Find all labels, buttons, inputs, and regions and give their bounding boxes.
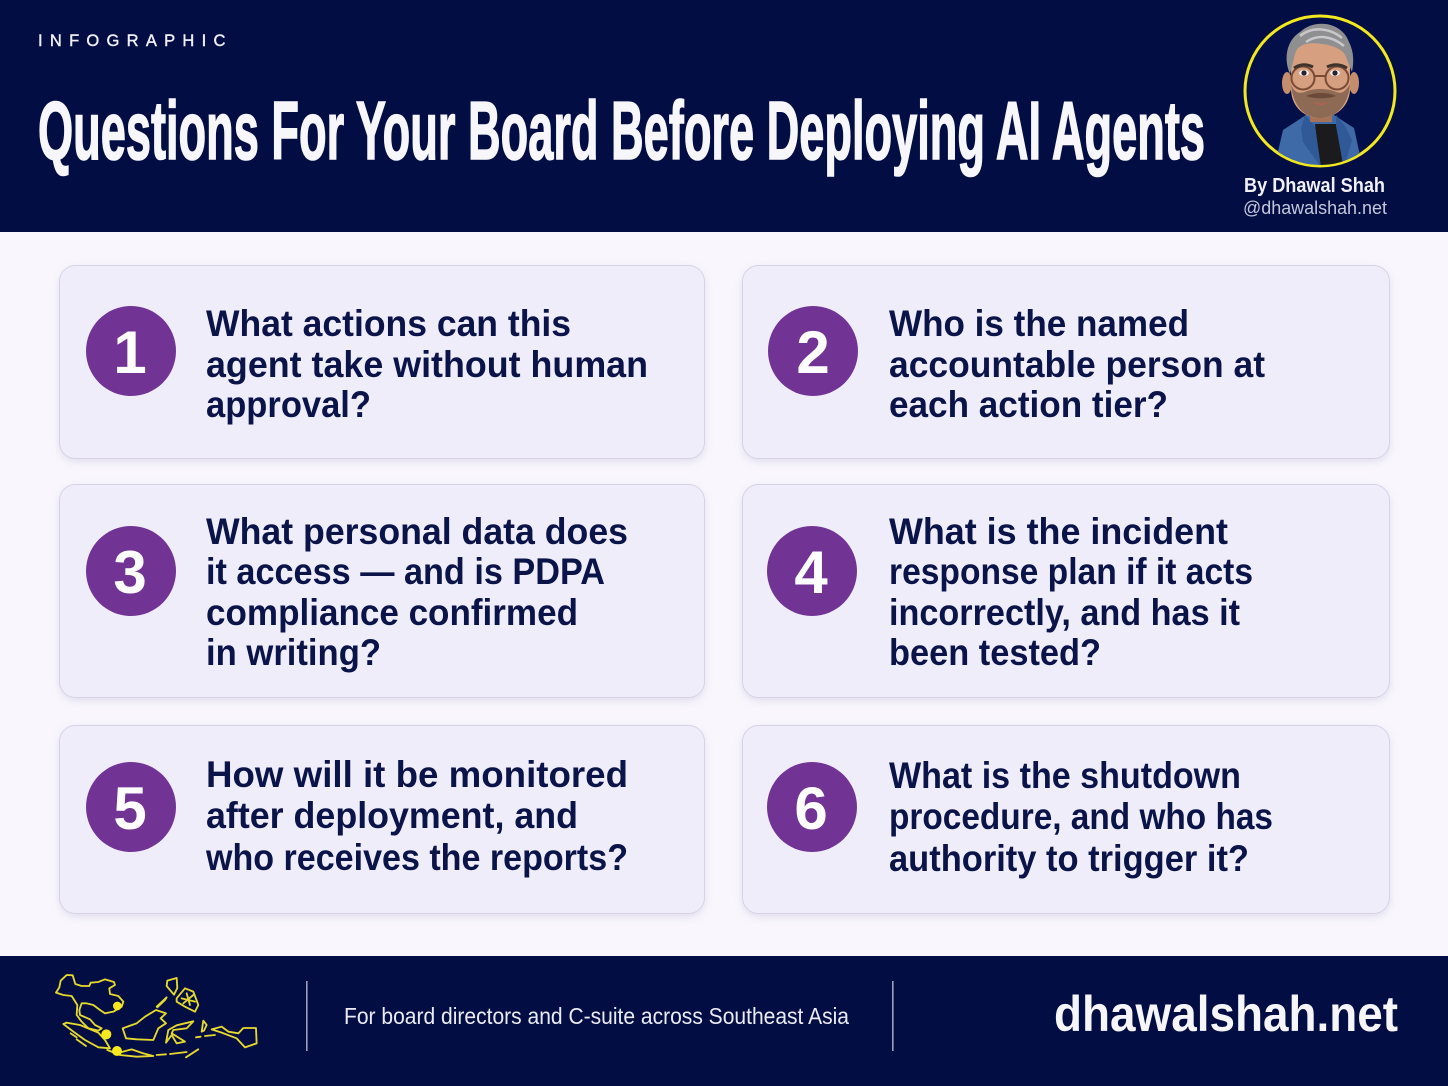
panel: question 2 [742,266,1390,458]
question text 2: each action tier? [889,384,1168,425]
footer band [0,956,1448,1086]
panel: question 6 [742,726,1390,914]
question text 5: How will it be monitored [206,754,628,795]
question text 4: been tested? [889,632,1101,673]
author portrait [1245,16,1395,172]
number badge 2 [768,306,858,396]
question text 6 [889,755,1273,879]
question text 4: What is the incident [889,511,1228,552]
number badge 5: 5 [113,775,147,842]
eyebrow label: INFOGRAPHIC [38,32,232,50]
panel: question 4 [742,484,1390,698]
question text 1: agent take without human [206,344,648,385]
question text 4: response plan if it acts [889,551,1253,592]
footer tagline: For board directors and C-suite across Southeast Asia [344,1003,849,1029]
question text 5 [205,754,628,878]
icon: Southeast Asia map [56,975,257,1057]
question text 2: Who is the named [889,303,1189,344]
number badge 5 [86,762,176,852]
number badge 4: 4 [794,539,828,606]
question text 1: approval? [206,384,371,425]
number badge 6 [767,762,857,852]
question text 6: authority to trigger it? [889,838,1249,879]
number badge 1: 1 [113,319,147,386]
question text 3: it access — and is PDPA [206,551,605,592]
author name: By Dhawal Shah [1244,175,1385,197]
number badge 1 [86,306,176,396]
divider left [306,981,308,1051]
divider right [892,981,894,1051]
number badge 3 [86,526,176,616]
question text 3 [206,511,628,673]
question text 5: after deployment, and [206,795,578,836]
question text 1 [206,303,648,425]
number badge 6: 6 [794,775,828,842]
question text 1: What actions can this [206,303,571,344]
question text 5: who receives the reports? [205,837,628,878]
question text 3: What personal data does [206,511,628,552]
question text 6: procedure, and who has [889,796,1273,837]
panel: question 1 [60,266,704,458]
footer website: dhawalshah.net [1054,986,1398,1042]
number badge 3: 3 [113,539,147,606]
panel: question 5 [60,726,704,914]
author handle: @dhawalshah.net [1243,197,1387,218]
question text 3: compliance confirmed [206,592,578,633]
question text 4 [889,511,1253,673]
question text 2: accountable person at [889,344,1265,385]
header band [0,0,1448,232]
number badge 2: 2 [796,319,830,386]
number badge 4 [767,526,857,616]
question text 3: in writing? [206,632,381,673]
question text 6: What is the shutdown [889,755,1241,796]
question text 2 [889,303,1265,425]
panel: question 3 [60,484,704,698]
question text 4: incorrectly, and has it [889,592,1240,633]
